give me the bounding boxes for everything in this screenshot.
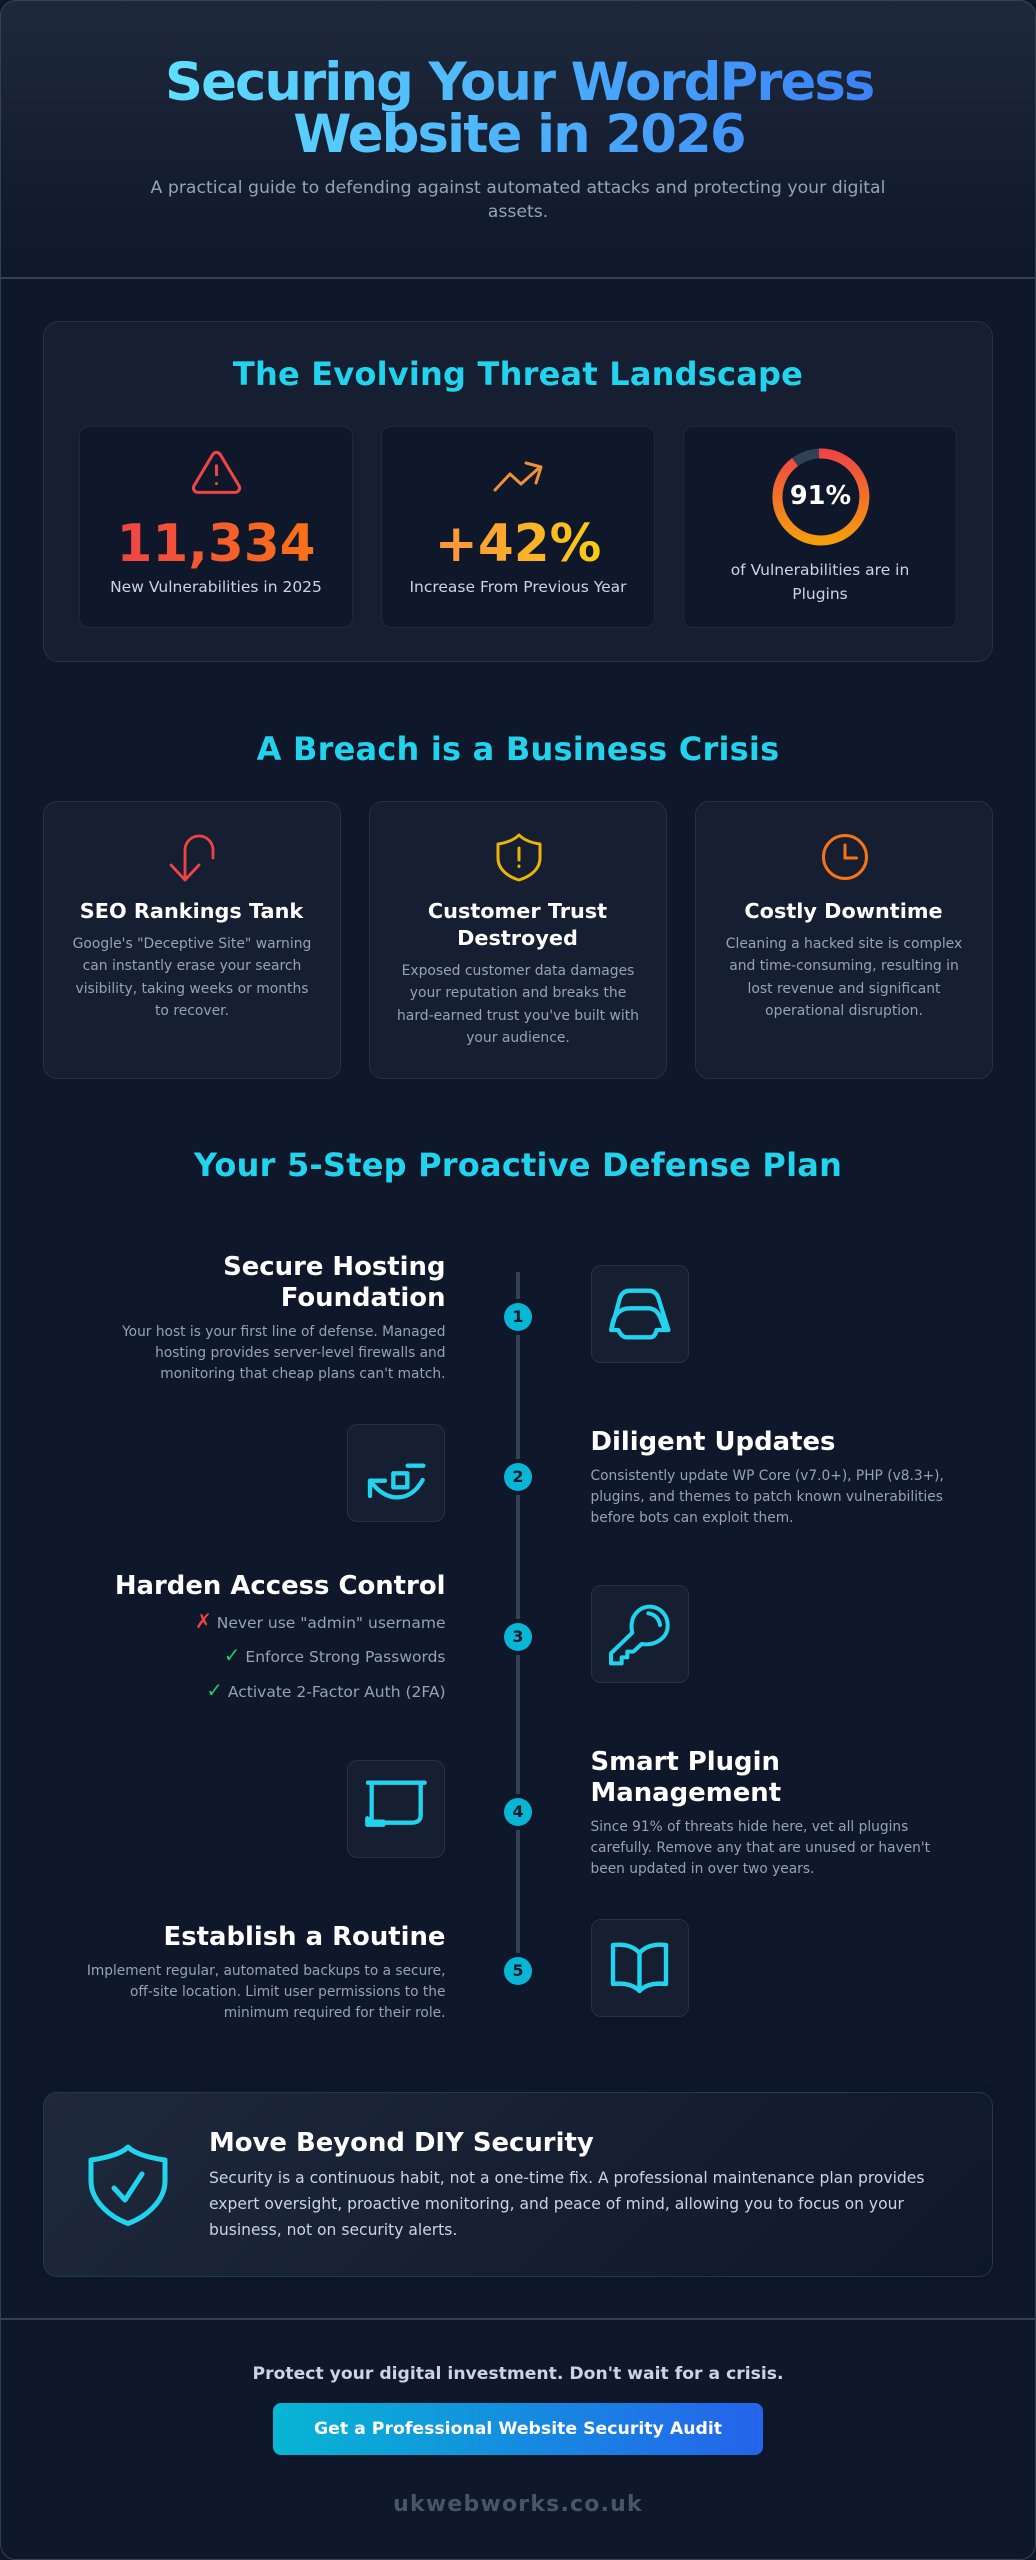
step 2 description: before bots can exploit them.: [590, 1510, 794, 1526]
node 3: 3: [512, 1627, 524, 1646]
step 4 description: carefully. Remove any that are unused or haven't: [590, 1840, 930, 1856]
step 2 heading: Diligent Updates: [590, 1426, 835, 1456]
heading: business crisis: A Breach is a Business Crisis: [257, 730, 779, 768]
node 5: [504, 1957, 532, 1985]
node 5: 5: [512, 1961, 524, 1980]
donut value: 91%: [790, 481, 851, 511]
label: [731, 561, 909, 603]
heading: threat landscape: The Evolving Threat Landscape: [233, 355, 803, 393]
step 1 text: [122, 1252, 446, 1382]
icon: plugin window: [347, 1760, 445, 1858]
icon: update refresh: [347, 1424, 445, 1522]
icon: trending up arrow: [493, 462, 542, 492]
button: security audit: [273, 2403, 763, 2455]
step 4 description: [590, 1819, 930, 1877]
button: security audit: Get a Professional Website Security Audit: [314, 2419, 722, 2439]
step 2 description: Consistently update WP Core (v7.0+), PHP (v8.3+),: [590, 1468, 944, 1484]
step 2 description: plugins, and themes to patch known vulnerabilities: [590, 1489, 943, 1505]
step 4 heading: [590, 1746, 781, 1808]
card title: Costly Downtime: [744, 899, 943, 923]
node 1: [504, 1303, 532, 1331]
node 4: [504, 1798, 532, 1826]
node 3: [504, 1623, 532, 1651]
step 4 description: been updated in over two years.: [590, 1861, 814, 1877]
step 3 heading: Harden Access Control: [115, 1570, 446, 1600]
stat card: vulnerabilities: [79, 426, 353, 628]
step 5 text: [87, 1922, 446, 2021]
step 1 heading: Secure Hosting: [223, 1252, 446, 1282]
card title: Destroyed: [457, 926, 578, 950]
step 4 heading: Smart Plugin: [590, 1746, 780, 1776]
footer site name: ukwebworks.co.uk: [393, 2492, 643, 2516]
card text: visibility, taking weeks or months: [75, 981, 309, 997]
title: Website in 2026: [293, 104, 745, 164]
card title: SEO Rankings Tank: [80, 899, 303, 923]
label: Plugins: [792, 585, 848, 603]
card text: Exposed customer data damages: [402, 963, 634, 979]
step 2 text: [590, 1426, 944, 1526]
card text: hard-earned trust you've built with: [397, 1008, 639, 1024]
subtitle: assets.: [488, 202, 548, 222]
step 1 heading: Foundation: [281, 1282, 446, 1312]
callout text: Security is a continuous habit, not a one-time fix. A professional maintenance plan provides: [209, 2169, 924, 2187]
step 5 description: off-site location. Limit user permissions to the: [130, 1984, 446, 2000]
icon: open book: [591, 1919, 689, 2017]
card title: [428, 899, 607, 950]
card text: [397, 963, 639, 1046]
step 1 heading: [223, 1252, 446, 1312]
footer: [0, 2318, 1036, 2560]
node 4: 4: [512, 1802, 524, 1821]
callout text: expert oversight, proactive monitoring, and peace of mind, allowing you to focus on your: [209, 2195, 904, 2213]
icon: key: [591, 1585, 689, 1683]
step 5 description: Implement regular, automated backups to a secure,: [87, 1963, 446, 1979]
stat card: plugins: [683, 426, 957, 628]
title: [165, 57, 873, 168]
heading: defense plan: Your 5-Step Proactive Defense Plan: [194, 1146, 842, 1184]
node 2: 2: [512, 1467, 524, 1486]
step 5 heading: Establish a Routine: [164, 1922, 446, 1952]
card text: operational disruption.: [765, 1003, 923, 1019]
step 1 description: monitoring that cheap plans can't match.: [160, 1366, 446, 1382]
icon: clock: [822, 834, 868, 880]
step 1 description: Your host is your first line of defense. Managed: [122, 1324, 446, 1340]
icon: falling arrow: [170, 834, 214, 882]
header: [0, 0, 1036, 279]
icon: shield alert: [496, 833, 542, 882]
step 4 text: [590, 1746, 930, 1877]
card text: Cleaning a hacked site is complex: [726, 936, 962, 952]
step 3 text: [115, 1570, 446, 1702]
card text: [726, 936, 962, 1019]
card title: Customer Trust: [428, 899, 607, 923]
label: New Vulnerabilities in 2025: [110, 578, 322, 596]
card text: and time-consuming, resulting in: [729, 958, 959, 974]
card: downtime: [695, 801, 993, 1079]
checklist: [195, 1608, 446, 1702]
callout: move beyond DIY: [43, 2092, 993, 2277]
icon: server stack: [591, 1265, 689, 1363]
step 1 description: hosting provides server-level firewalls and: [155, 1345, 446, 1361]
title: Securing Your WordPress: [165, 52, 873, 113]
timeline line: [516, 1272, 520, 1971]
card text: lost revenue and significant: [747, 981, 941, 997]
callout text: [209, 2169, 924, 2239]
card text: your reputation and breaks the: [410, 985, 626, 1001]
node 2: [504, 1463, 532, 1491]
value: +42%: +42%: [435, 514, 601, 574]
checklist item: passwords: ✓ Enforce Strong Passwords: [224, 1643, 446, 1667]
step 4 description: Since 91% of threats hide here, vet all plugins: [590, 1819, 908, 1835]
card: SEO: [43, 801, 341, 1079]
card text: to recover.: [155, 1003, 229, 1019]
footer prompt: Protect your digital investment. Don't wait for a crisis.: [252, 2364, 784, 2384]
callout heading: Move Beyond DIY Security: [209, 2128, 594, 2158]
label: of Vulnerabilities are in: [731, 561, 909, 579]
label: Increase From Previous Year: [409, 578, 627, 596]
step 1 description: [122, 1324, 446, 1382]
card text: Google's "Deceptive Site" warning: [73, 936, 311, 952]
subtitle: A practical guide to defending against automated attacks and protecting your digital: [151, 178, 885, 198]
card text: can instantly erase your search: [83, 958, 301, 974]
step 4 heading: Management: [590, 1778, 781, 1808]
card: trust: [369, 801, 667, 1079]
card text: [73, 936, 311, 1019]
step 5 description: [87, 1963, 446, 2021]
step 2 description: [590, 1468, 944, 1526]
stat card: increase: [381, 426, 655, 628]
checklist item: 2FA: ✓ Activate 2-Factor Auth (2FA): [206, 1678, 446, 1702]
card text: your audience.: [466, 1030, 570, 1046]
step 5 description: minimum required for their role.: [224, 2005, 446, 2021]
callout text: business, not on security alerts.: [209, 2221, 457, 2239]
value: 11,334: 11,334: [116, 514, 316, 574]
subtitle: [150, 178, 885, 222]
node 1: 1: [512, 1307, 524, 1326]
checklist item: admin: ✗ Never use "admin" username: [195, 1608, 446, 1632]
donut chart: 91%: [772, 448, 870, 546]
icon: warning triangle: [192, 450, 242, 494]
panel: threat landscape: [43, 321, 993, 662]
icon: shield check: [88, 2144, 168, 2226]
